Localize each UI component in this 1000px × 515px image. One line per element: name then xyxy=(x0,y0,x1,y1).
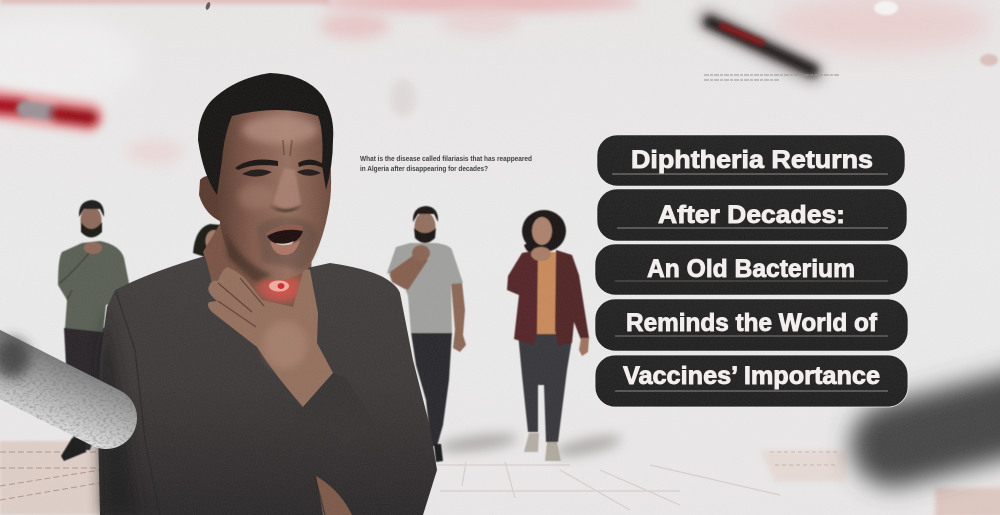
eye right xyxy=(297,169,321,176)
hair xyxy=(79,200,104,217)
hand highlight xyxy=(263,321,307,369)
person: woman behind main man xyxy=(193,224,222,257)
beard xyxy=(414,228,436,243)
person: woman in plaid shirt xyxy=(507,210,589,461)
pill 4: Reminds the World of xyxy=(626,309,878,337)
neck xyxy=(203,215,312,325)
pill 1 xyxy=(597,135,905,186)
face xyxy=(532,217,552,245)
pill 1: Diphtheria Returns xyxy=(631,146,873,174)
hand xyxy=(412,245,430,261)
eyebrow right xyxy=(298,160,326,169)
head xyxy=(414,212,436,242)
lower lip xyxy=(270,240,300,255)
jeans xyxy=(518,333,573,442)
floor tiles xyxy=(0,441,1000,515)
face xyxy=(206,230,222,252)
head xyxy=(80,206,102,234)
gray bacillus, left xyxy=(0,338,106,418)
forehead creases xyxy=(283,140,292,156)
t-shirt xyxy=(387,243,463,333)
open mouth xyxy=(267,230,303,244)
throat glow xyxy=(251,269,311,307)
jacket right xyxy=(555,250,589,346)
dark red blurred bacterium, top right xyxy=(708,20,812,72)
floor shadows xyxy=(437,431,623,460)
shoe xyxy=(434,444,443,462)
hair xyxy=(413,206,438,222)
main man xyxy=(98,73,437,515)
sweater left shadow xyxy=(98,310,140,515)
forehead highlight xyxy=(242,116,318,144)
teeth xyxy=(276,241,294,246)
upper lip xyxy=(265,224,303,238)
sneakers xyxy=(524,433,539,452)
stubble xyxy=(257,216,318,270)
jeans xyxy=(411,332,452,446)
caption text xyxy=(360,154,532,173)
hair xyxy=(522,210,566,252)
jacket left xyxy=(507,250,538,345)
pill 3 xyxy=(595,244,908,295)
hand xyxy=(84,242,102,254)
hand xyxy=(531,247,551,261)
red blurred bacterium, left xyxy=(0,104,90,118)
gray blurred bacterium, bottom right xyxy=(893,405,1000,445)
shoe xyxy=(61,438,86,461)
hand on right xyxy=(579,338,589,356)
sweater xyxy=(58,241,129,332)
person: man in green sweater xyxy=(58,200,129,461)
title pills xyxy=(595,135,908,407)
pill 4 xyxy=(595,299,908,351)
cheek highlight xyxy=(238,184,274,210)
pill 2 xyxy=(597,189,907,241)
nostril shadow xyxy=(270,206,301,212)
illegible faint caption, drawn as placeholder strokes xyxy=(704,75,840,80)
right arm xyxy=(451,282,466,352)
lower hand xyxy=(316,476,352,515)
eyebrow left xyxy=(235,160,278,170)
sweater fold xyxy=(116,292,325,515)
face xyxy=(216,106,331,280)
caption text: in Algeria after disappearing for decades? xyxy=(360,164,488,173)
throat lesion xyxy=(269,280,289,292)
sweater cuff xyxy=(292,373,376,445)
hand xyxy=(208,267,333,407)
ear xyxy=(199,176,222,222)
person: man in gray t-shirt xyxy=(387,206,466,462)
beard xyxy=(81,222,102,238)
hair xyxy=(198,73,333,195)
orange top xyxy=(536,252,557,334)
eye left xyxy=(242,169,272,177)
pill 5: Vaccines’ Importance xyxy=(623,362,880,390)
forearm across chest xyxy=(390,252,428,290)
arm fold xyxy=(60,252,90,300)
hair xyxy=(193,224,222,257)
left arm xyxy=(388,244,432,292)
jaw shadow xyxy=(224,228,272,282)
trousers xyxy=(64,328,106,450)
pill 5 xyxy=(595,355,908,407)
finger lines xyxy=(218,278,264,327)
caption text: What is the disease called filariasis that has reappeared xyxy=(360,154,532,163)
pill 3: An Old Bacterium xyxy=(647,255,855,283)
sweater xyxy=(98,256,437,515)
pill 2: After Decades: xyxy=(658,201,845,229)
nose xyxy=(273,168,301,208)
